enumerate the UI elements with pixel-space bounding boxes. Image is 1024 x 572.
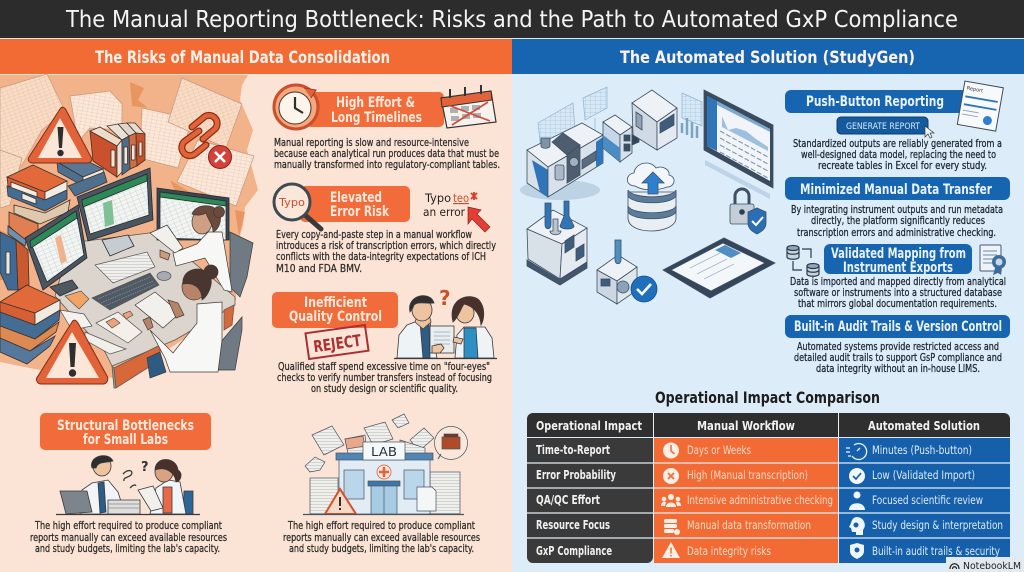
badge: notebooklm — [946, 557, 1024, 572]
left-bottom stack — [0, 285, 60, 364]
row: resource focus: Manual data transformation — [687, 518, 811, 532]
block: push-button reporting — [785, 81, 1003, 172]
table column fills — [527, 438, 1010, 563]
row: resource focus — [536, 517, 1003, 535]
heading pill: Quality Control — [289, 309, 382, 325]
row: qa/qc effort: Intensive administrative checking — [687, 493, 833, 507]
heading pill: Elevated — [330, 190, 382, 206]
row: error probability — [536, 468, 975, 484]
floating data screens — [538, 87, 702, 150]
sheets of paper — [0, 74, 254, 208]
heading pill: Push-Button Reporting — [806, 94, 944, 110]
title bar — [0, 0, 1024, 38]
desk papers and keyboard — [60, 252, 171, 354]
text: description — [790, 275, 1006, 310]
heading pill — [40, 413, 211, 450]
heading pill — [785, 90, 975, 113]
illustration: confused scientists: ? — [141, 460, 149, 475]
heading: right panel: The Automated Solution (StudyGen) — [620, 48, 915, 68]
text: description: checks to verify number transfers instead of focusing — [277, 371, 492, 384]
text: description: manually transformed into regulatory-compliant tables. — [274, 158, 500, 171]
text: description — [274, 136, 500, 171]
text: description: Manual reporting is slow and resource-intensive — [274, 136, 469, 149]
lock and shield — [730, 189, 766, 234]
text: typo example and cursor: Typo — [424, 191, 451, 205]
table header row: Manual Workflow — [697, 418, 795, 433]
title bar: The Manual Reporting Bottleneck: Risks and the Path to Automated GxP Compliance — [65, 7, 958, 33]
analyst two — [135, 265, 242, 378]
button: generate report: GENERATE REPORT — [846, 122, 920, 132]
text: typo example and cursor: teo — [453, 191, 469, 205]
icon: red x — [208, 146, 232, 168]
icon: database mapping — [787, 246, 819, 276]
text: description: introduces a risk of transcription errors, which directly — [276, 239, 496, 252]
text: description: on study design or scientific quality. — [311, 382, 458, 395]
stamp: reject — [305, 325, 369, 359]
text: description: The high effort required to produce compliant — [287, 519, 476, 532]
text: description: Qualified staff spend excessive time on "four-eyes" — [278, 360, 490, 373]
block: lab with budget overload — [283, 414, 480, 555]
row: time-to-report: Minutes (Push-button) — [872, 443, 972, 457]
panel: risks of manual data consolidation — [0, 39, 512, 555]
illustration: overwhelmed analysts at desk — [0, 74, 258, 388]
table header row — [527, 413, 1010, 437]
text: description — [793, 137, 1002, 172]
illustration: connected lab instruments — [520, 87, 775, 304]
table header row: Automated Solution — [868, 418, 980, 433]
row: qa/qc effort: QA/QC Effort — [536, 493, 600, 507]
row: qa/qc effort: Focused scientific review — [872, 493, 983, 507]
heading pill: Validated Mapping from — [831, 246, 966, 262]
badge: notebooklm: NotebookLM — [963, 561, 1021, 572]
text: description — [791, 203, 1003, 239]
block: elevated error risk — [274, 184, 496, 275]
heading pill: Long Timelines — [331, 110, 422, 126]
row: gxp compliance: GxP Compliance — [536, 544, 612, 558]
block: structural bottlenecks for small labs — [30, 413, 227, 555]
icon: report document — [957, 81, 1003, 131]
button: generate report — [837, 117, 934, 138]
cloud database — [627, 163, 676, 231]
instrument: mass spectrometer — [520, 123, 603, 200]
analyst one — [150, 206, 253, 297]
row: time-to-report: Time-to-Report — [536, 443, 610, 457]
instrument: small module — [603, 115, 639, 162]
instrument: rack with tubes — [527, 201, 587, 285]
illustration: scientists reviewing — [394, 286, 497, 358]
tablet with report — [663, 238, 775, 298]
heading pill: for Small Labs — [83, 432, 168, 448]
panel: the automated solution — [512, 39, 1024, 563]
broken chain link — [182, 115, 217, 156]
block: validated mapping from instrument exports — [787, 244, 1006, 310]
table header row: Operational Impact — [536, 418, 642, 433]
block: minimized manual data transfer — [785, 177, 1010, 239]
row: time-to-report — [536, 442, 972, 460]
spreadsheet monitors — [25, 168, 229, 296]
heading pill: Structural Bottlenecks — [57, 418, 194, 434]
row: gxp compliance: Data integrity risks — [687, 544, 771, 558]
instrument: validated module — [597, 240, 657, 304]
illustration: scientists reviewing: ? — [439, 286, 451, 310]
icon: calendar crossed — [441, 85, 496, 128]
heading pill — [300, 186, 410, 222]
upright binders — [90, 123, 145, 177]
icon: warning triangle upper — [28, 107, 92, 163]
icon: magnifier on typo: Typo — [278, 196, 305, 209]
row: gxp compliance — [536, 542, 1000, 559]
text: description: reports manually can exceed available resources — [30, 531, 227, 544]
heading pill — [824, 244, 972, 276]
text: description: Every copy-and-paste step in a manual workflow — [276, 228, 472, 241]
text: description — [276, 228, 496, 275]
flat stacks of binders — [0, 156, 107, 290]
row: error probability: Error Probability — [536, 468, 616, 482]
illustration: lab building with paper piles — [303, 414, 468, 514]
heading: left panel: The Risks of Manual Data Consolidation — [95, 48, 390, 68]
text: description: and study budgets, limiting the lab's capacity. — [35, 542, 220, 555]
row: error probability: Low (Validated Import) — [872, 468, 975, 482]
heading: right panel — [512, 39, 1024, 74]
heading pill: Instrument Exports — [843, 260, 953, 276]
block: inefficient quality control — [272, 286, 497, 395]
text: description — [794, 340, 1002, 375]
icon: report document: Report — [966, 85, 984, 94]
text: description: M10 and FDA BMV. — [276, 262, 362, 275]
stamp: reject: REJECT — [312, 331, 362, 356]
heading pill — [785, 315, 1010, 338]
row: qa/qc effort — [536, 492, 983, 510]
text: description — [277, 360, 492, 395]
heading: left panel — [0, 39, 512, 74]
row: error probability: High (Manual transcription) — [687, 468, 808, 482]
desk — [55, 232, 235, 388]
illustration: lab building with paper piles: LAB — [371, 444, 397, 459]
text: description: The high effort required to produce compliant — [34, 519, 223, 532]
heading: operational impact comparison: Operational Impact Comparison — [655, 388, 880, 407]
text: typo example and cursor — [423, 191, 490, 232]
heading pill: Error Risk — [330, 204, 390, 220]
heading pill: High Effort & — [336, 95, 415, 111]
text: description: because each analytical run produces data that must be — [274, 147, 499, 160]
heading pill — [785, 177, 1010, 200]
text: description — [30, 519, 227, 555]
text: description: reports manually can exceed available resources — [283, 531, 480, 544]
heading pill: Inefficient — [304, 295, 367, 311]
dashboard monitor — [704, 90, 773, 199]
text: description — [283, 519, 480, 555]
text: typo example and cursor: an error — [423, 205, 465, 219]
icon: certified document — [980, 245, 1006, 275]
block: built-in audit trails — [785, 315, 1010, 375]
row: time-to-report: Days or Weeks — [687, 443, 751, 457]
icon: warning triangle lower — [37, 320, 108, 384]
icon: magnifier on typo — [274, 184, 321, 229]
block: high effort and long timelines — [274, 85, 500, 171]
icon: clock — [274, 85, 318, 129]
heading pill — [272, 292, 398, 328]
heading pill — [306, 92, 444, 127]
instrument: tall module — [632, 90, 677, 150]
illustration: confused scientists — [56, 456, 200, 514]
text: description: conflicts with the data-integrity expectations of ICH — [276, 250, 486, 263]
text: description: and study budgets, limiting the lab's capacity. — [289, 542, 474, 555]
row: resource focus: Resource Focus — [536, 518, 610, 532]
comparison table — [527, 413, 1010, 563]
